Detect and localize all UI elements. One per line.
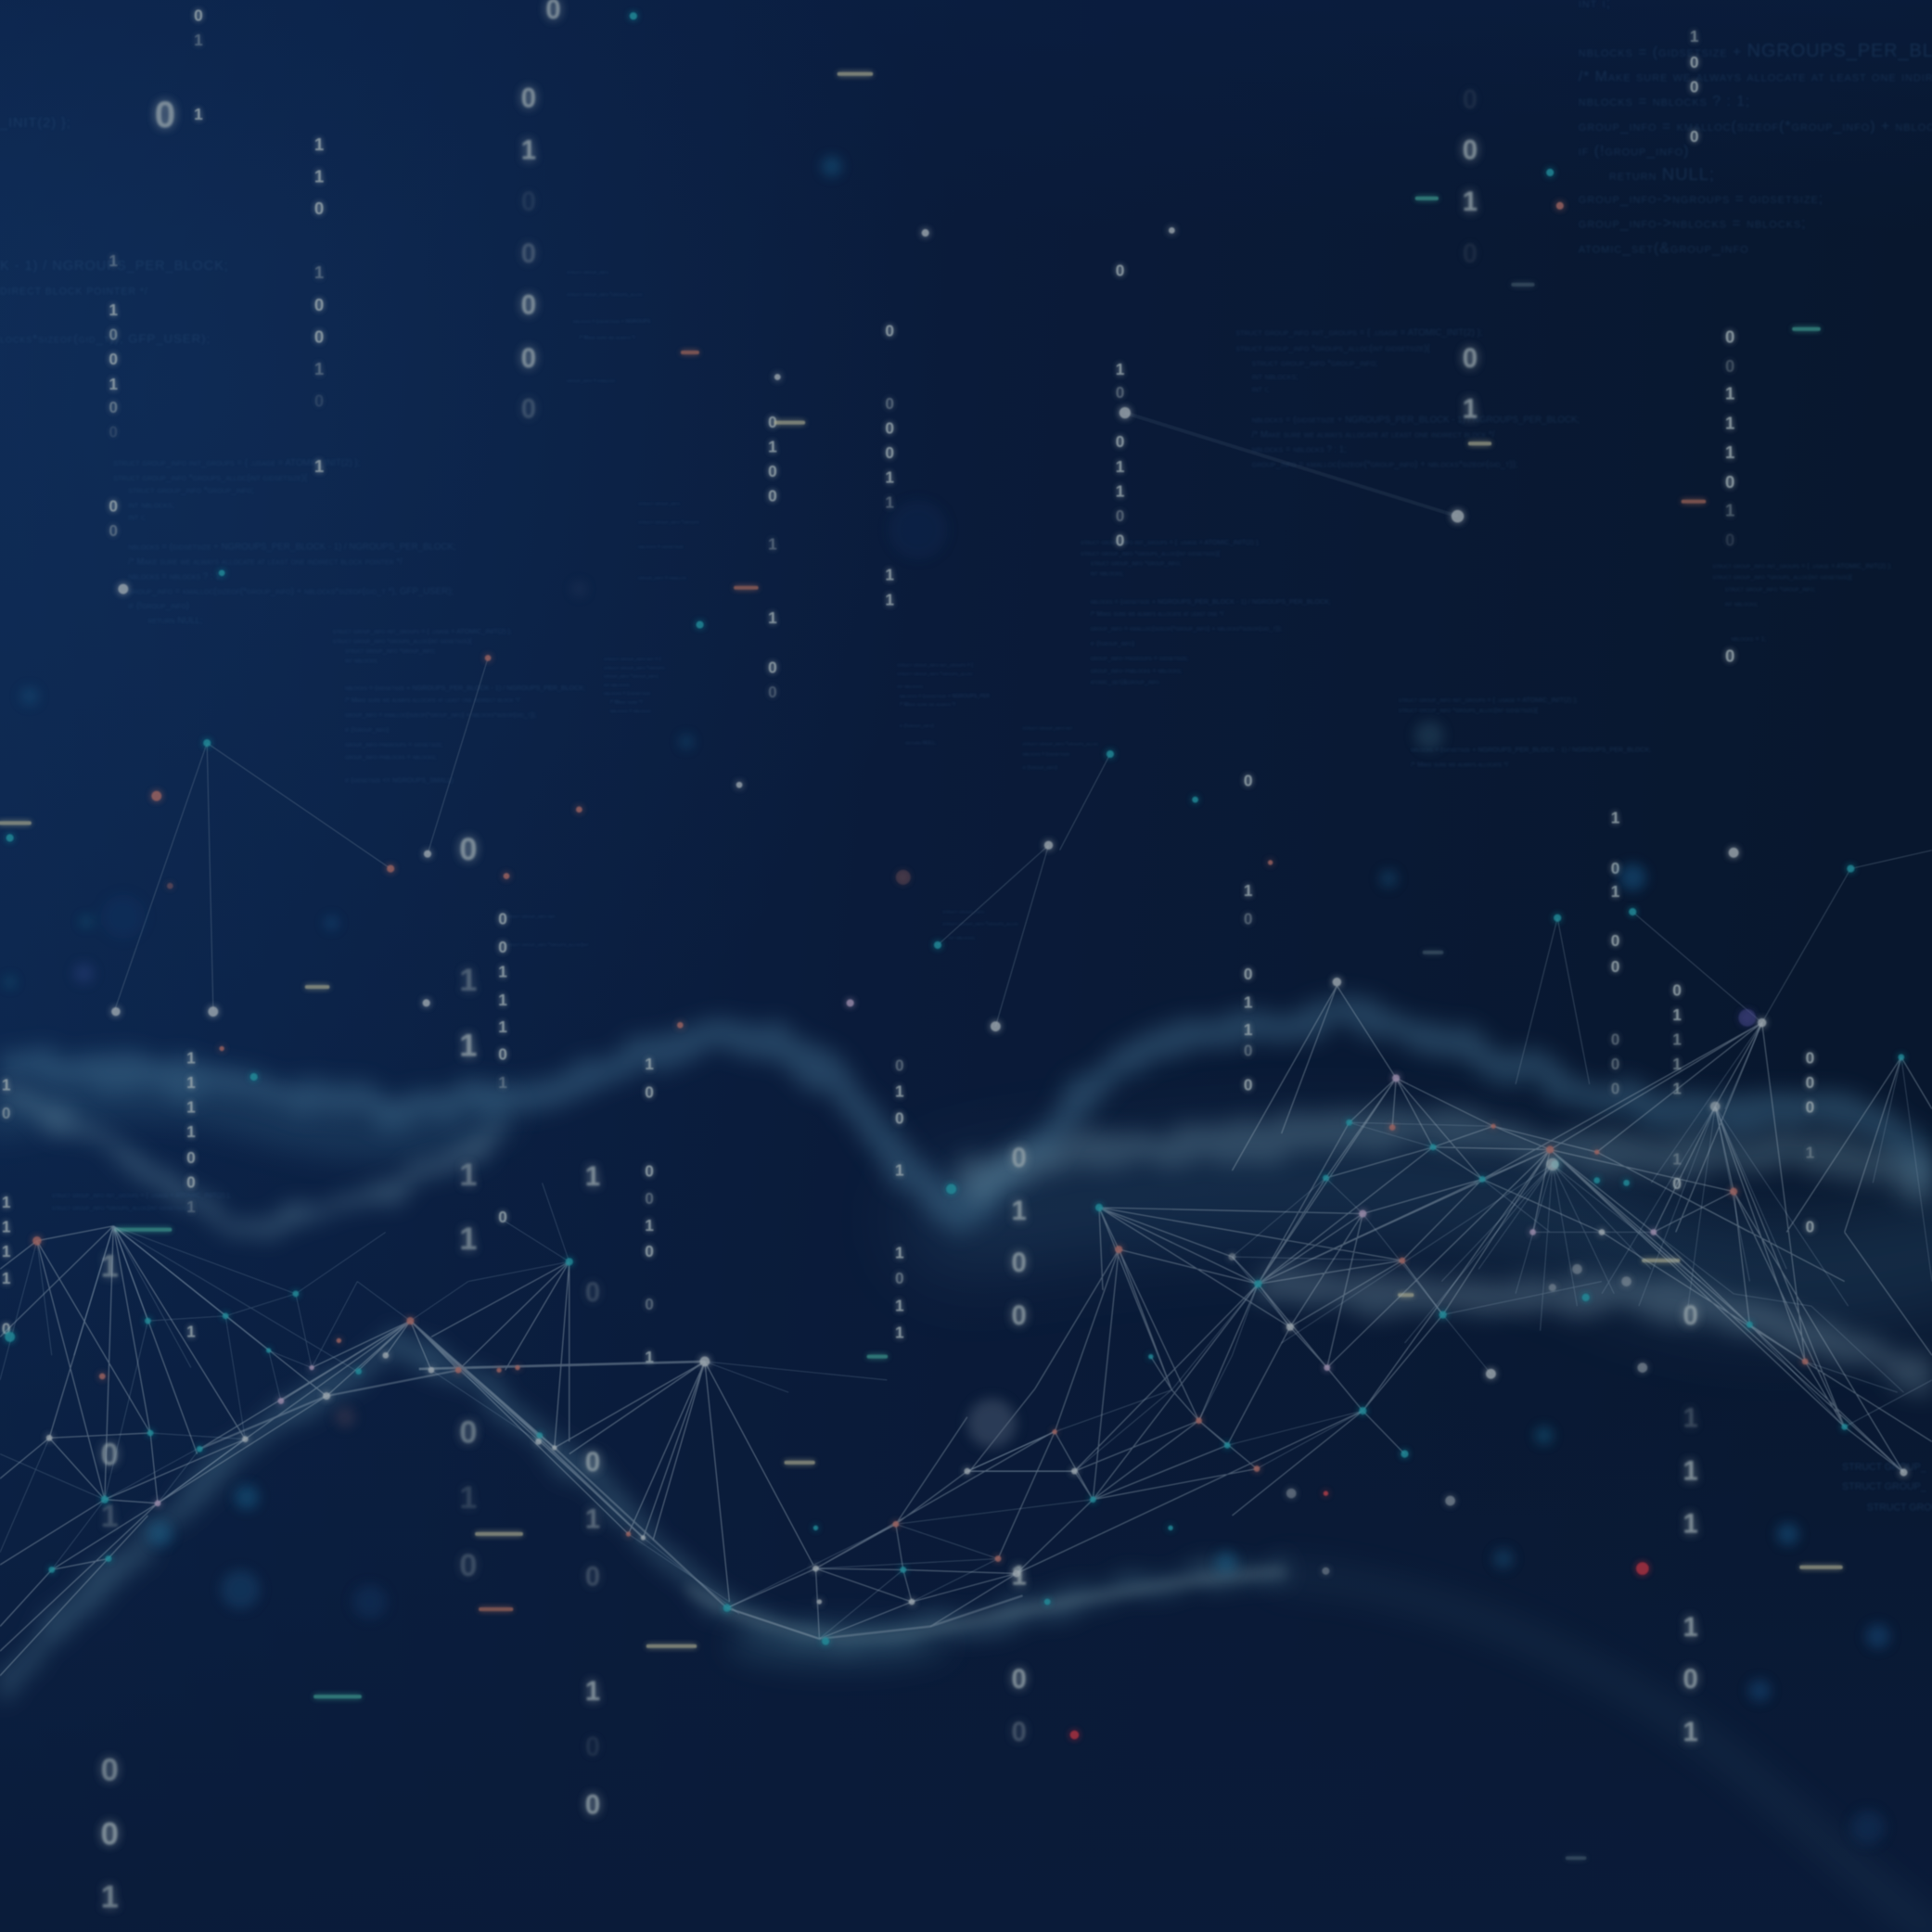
binary digit columns, small and sharp: 0 bbox=[2, 1320, 10, 1338]
binary digit columns, small and sharp: 1 bbox=[645, 1348, 654, 1366]
binary digit columns, small and sharp: 0 bbox=[1116, 506, 1124, 525]
blurred code text block top right: group_info->ngroups = gidsetsize; bbox=[1579, 191, 1823, 207]
faint code fragments: struct group_info *groups_alloc(int gidsetsize){ bbox=[1235, 344, 1430, 354]
binary digit columns, large and blurred: 1 bbox=[1683, 1718, 1698, 1747]
binary digit columns, small and sharp: 0 bbox=[1806, 1217, 1814, 1235]
binary digit columns, small and sharp: 1 bbox=[186, 1197, 196, 1216]
small code fragments: nblocks = (gidsetsize + NGROUPS_PER_BLOCK - 1) / NGROUPS_PER_BLOCK; bbox=[345, 685, 585, 692]
binary digit columns, small and sharp: 1 bbox=[194, 31, 203, 49]
binary digit columns, small and sharp: 0 bbox=[1244, 909, 1253, 928]
binary digit columns, small and sharp: 1 bbox=[2, 1269, 11, 1287]
faint code fragments: int nblocks; bbox=[1252, 372, 1299, 382]
small code fragments: group_info->ngroups = gidsetsize; bbox=[345, 741, 443, 748]
binary digit columns, small and sharp: 1 bbox=[109, 375, 118, 393]
binary digit columns, small and sharp: 1 bbox=[768, 438, 777, 456]
binary digit columns, small and sharp: 0 bbox=[186, 1148, 196, 1167]
binary digit columns, small and sharp: 1 bbox=[1672, 1149, 1682, 1168]
binary digit columns, small and sharp: 0 bbox=[768, 462, 777, 480]
binary digit columns, small and sharp: 1 bbox=[186, 1073, 196, 1092]
binary digit columns, large and blurred: 1 bbox=[1683, 1510, 1698, 1540]
tiny code fragments: struct group_info *groups bbox=[638, 520, 699, 526]
binary digit columns, small and sharp: 1 bbox=[895, 1243, 904, 1261]
binary digit columns, large and blurred: 0 bbox=[521, 239, 536, 269]
binary digit columns, large and blurred: 1 bbox=[101, 1499, 119, 1534]
binary digit columns, small and sharp: 1 bbox=[1611, 882, 1620, 901]
binary digit columns, small and sharp: 0 bbox=[645, 1083, 654, 1102]
tiny code fragments: if (!group_info) bbox=[900, 723, 934, 729]
binary digit columns, small and sharp: 1 bbox=[314, 167, 324, 186]
tiny code fragments: struct group_info init = { bbox=[604, 657, 661, 662]
faint code fragments: return NULL; bbox=[147, 616, 203, 626]
blurred code text block top right: nblocks = nblocks ? : 1; bbox=[1579, 94, 1750, 109]
binary digit columns, small and sharp: 1 bbox=[314, 359, 324, 378]
binary digit columns, small and sharp: 1 bbox=[1672, 1030, 1682, 1049]
binary digit columns, large and blurred: 1 bbox=[1463, 187, 1478, 217]
binary digit columns, small and sharp: 0 bbox=[885, 394, 894, 413]
binary digit columns, small and sharp: 0 bbox=[645, 1162, 654, 1181]
binary digit columns, large and blurred: 1 bbox=[459, 1028, 477, 1063]
faint code fragments: struct group_info init_groups = { .usage = ATOMIC_INIT(2) }; bbox=[1235, 327, 1483, 338]
binary digit columns, small and sharp: 1 bbox=[895, 1324, 904, 1342]
tiny code fragments: struct group_info init bbox=[1023, 725, 1073, 731]
binary digit columns, small and sharp: 0 bbox=[1690, 53, 1698, 71]
small code fragments: struct group_info *groups_alloc(int gidsetsize){ bbox=[1713, 573, 1852, 581]
binary digit columns, small and sharp: 0 bbox=[1244, 1076, 1253, 1094]
binary digit columns, large and blurred: 0 bbox=[1011, 1144, 1027, 1173]
tiny code fragments: int nblocks; bbox=[949, 935, 975, 940]
network mesh: left secondary fine lines bbox=[0, 1183, 887, 1614]
blurred code text block top left: K - 1) / NGROUPS_PER_BLOCK; bbox=[0, 259, 229, 274]
tiny code fragments: struct group_info *groups_alloc bbox=[897, 672, 973, 677]
small code fragments: struct group_info init_groups = { .usage = ATOMIC_INIT(2) }; bbox=[333, 628, 512, 635]
faint code fragments: if (!group_info) bbox=[128, 601, 189, 611]
binary digit columns, small and sharp: 0 bbox=[1725, 646, 1734, 665]
faint code fragments: struct group_info *group_info; bbox=[1252, 359, 1377, 369]
binary digit columns, small and sharp: 1 bbox=[1690, 27, 1699, 45]
binary digit columns, small and sharp: 0 bbox=[1806, 1098, 1814, 1117]
binary digit columns, large and blurred: 0 bbox=[459, 1548, 477, 1583]
binary digit columns, small and sharp: 0 bbox=[1672, 980, 1682, 999]
binary digit columns, small and sharp: 0 bbox=[885, 419, 894, 438]
tiny code fragments: nblocks = (gidsetsize + NGROUPS_PER bbox=[900, 694, 990, 699]
small code fragments: struct group_info *group_info; bbox=[1091, 560, 1181, 568]
binary digit columns, small and sharp: 0 bbox=[109, 423, 118, 441]
binary digit columns, small and sharp: 1 bbox=[1725, 501, 1734, 520]
binary digit columns, large and blurred: 1 bbox=[585, 1677, 600, 1707]
blurred code text block top right: atomic_set(&group_info bbox=[1579, 240, 1749, 256]
binary digit columns, small and sharp bbox=[2, 6, 1815, 1366]
binary digit columns, large and blurred: 0 bbox=[1463, 135, 1478, 165]
small code fragments bbox=[52, 539, 1932, 1514]
binary digit columns, small and sharp: 0 bbox=[194, 6, 203, 25]
small code fragments: group_info->ngroups = gidsetsize; bbox=[1091, 655, 1189, 662]
binary digit columns, small and sharp: 1 bbox=[186, 1122, 196, 1141]
tiny code fragments bbox=[505, 270, 1099, 948]
binary digit columns, large and blurred: 0 bbox=[585, 1448, 600, 1478]
blurred code text block top left: DIRECT BLOCK POINTER */ bbox=[0, 286, 148, 297]
binary digit columns, large and blurred: 0 bbox=[459, 1415, 477, 1451]
binary digit columns, small and sharp: 1 bbox=[1116, 457, 1125, 476]
binary digit columns, small and sharp: 0 bbox=[895, 1056, 904, 1074]
binary digit columns, small and sharp: 0 bbox=[1611, 1030, 1619, 1049]
binary digit columns, small and sharp: 1 bbox=[1611, 808, 1620, 826]
sparse upper connections bbox=[115, 413, 1932, 1084]
small code fragments: /* Make sure we always allocate */ bbox=[1411, 761, 1508, 768]
binary digit columns, small and sharp: 0 bbox=[498, 909, 507, 928]
binary digit columns, small and sharp: 0 bbox=[1806, 1048, 1814, 1067]
binary digit columns, small and sharp: 0 bbox=[895, 1109, 904, 1128]
blurred code text block top right bbox=[1579, 0, 1932, 256]
binary digit columns, small and sharp: 0 bbox=[109, 350, 118, 368]
binary digit columns, small and sharp: 1 bbox=[1244, 993, 1253, 1012]
binary digit columns, large and blurred: 0 bbox=[101, 1438, 119, 1473]
binary digit columns, large and blurred: 0 bbox=[521, 394, 536, 424]
tiny code fragments: if (!group_info) bbox=[1023, 765, 1057, 771]
binary digit columns, large and blurred: 1 bbox=[585, 1162, 600, 1192]
small code fragments: group_info = kmalloc(sizeof(*group_info) + nblocks*sizeof(gid_t)); bbox=[345, 711, 536, 719]
binary digit columns, small and sharp: 1 bbox=[109, 251, 118, 270]
tiny code fragments: nblocks = (gidsetsize bbox=[1023, 751, 1070, 757]
tiny code fragments: int nblocks; bbox=[604, 683, 630, 688]
binary digit columns, large and blurred: 1 bbox=[459, 1222, 477, 1257]
binary digit columns, small and sharp: 1 bbox=[1116, 360, 1125, 378]
tiny code fragments: struct group_info init bbox=[505, 915, 556, 920]
binary digit columns, small and sharp: 1 bbox=[1672, 1005, 1682, 1024]
faint code fragments: /* Make sure we always allocate at least one indirect block */ bbox=[1252, 430, 1495, 441]
binary digit columns, small and sharp: 0 bbox=[1611, 859, 1619, 877]
tiny code fragments: /* Make sure we always */ bbox=[579, 335, 635, 340]
network nodes: warm red bbox=[32, 202, 1808, 1739]
binary digit columns, large and blurred: 1 bbox=[459, 1480, 477, 1516]
binary digit columns, large and blurred: 0 bbox=[101, 1817, 119, 1852]
binary digit columns, small and sharp: 1 bbox=[1725, 413, 1734, 432]
binary digit columns, small and sharp: 0 bbox=[885, 322, 894, 340]
binary digit columns, small and sharp: 0 bbox=[645, 1295, 654, 1313]
small code fragments: struct group_info *group_info; bbox=[345, 647, 436, 655]
binary digit columns, small and sharp: 1 bbox=[186, 1322, 196, 1340]
binary digit columns, small and sharp: 0 bbox=[109, 326, 118, 344]
binary digit columns, small and sharp: 0 bbox=[1244, 772, 1253, 790]
binary digit columns, small and sharp: 0 bbox=[1611, 1055, 1619, 1073]
binary digit columns, small and sharp: 1 bbox=[194, 105, 203, 123]
small code fragments: struct group_info *groups_alloc(int gidsetsize){ bbox=[1399, 707, 1539, 714]
tiny code fragments: nblocks = gidsetsize bbox=[638, 544, 684, 550]
small code fragments: group_info = kmalloc(sizeof(*group_info) + nblocks*sizeof(gid_t)); bbox=[1091, 625, 1282, 633]
binary digit columns, small and sharp: 1 bbox=[2, 1217, 11, 1235]
network nodes: pink and violet bbox=[155, 999, 1756, 1506]
binary digit columns, large and blurred: 0 bbox=[585, 1790, 600, 1820]
binary digit columns, small and sharp: 1 bbox=[1725, 383, 1734, 403]
small code fragments: /* Make sure we always allocate at least one indirect block */ bbox=[345, 697, 519, 704]
binary digit columns, small and sharp: 1 bbox=[1672, 1080, 1682, 1098]
binary digit columns, large and blurred: 0 bbox=[1463, 239, 1478, 269]
binary digit columns, small and sharp: 1 bbox=[1806, 1144, 1815, 1162]
binary digit columns, small and sharp: 1 bbox=[498, 991, 507, 1009]
binary digit columns, large and blurred: 0 bbox=[585, 1278, 600, 1308]
tiny code fragments: nblocks = (gidsetsize bbox=[604, 691, 651, 697]
network mesh: right secondary fine lines bbox=[727, 1023, 1932, 1639]
binary digit columns, small and sharp: 0 bbox=[1725, 356, 1734, 376]
small code fragments: struct group_info init_groups = { .usage = ATOMIC_INIT(2) }; bbox=[1399, 697, 1578, 704]
binary digit columns, small and sharp: 0 bbox=[498, 1208, 507, 1226]
small code fragments: struct group_info *groups_alloc(int gidsetsize){ bbox=[52, 1205, 192, 1212]
binary digit columns, large and blurred: 0 bbox=[459, 832, 477, 867]
binary digit columns, large and blurred: 0 bbox=[1683, 1301, 1698, 1331]
binary digit columns, large and blurred: 1 bbox=[521, 135, 536, 165]
binary digit columns, small and sharp: 0 bbox=[1672, 1174, 1682, 1193]
small code fragments: group_info->nblocks = nblocks; bbox=[1091, 667, 1182, 674]
binary digit columns, small and sharp: 0 bbox=[1806, 1073, 1814, 1092]
binary digit columns, small and sharp: 1 bbox=[314, 262, 324, 282]
binary digit columns, small and sharp: 0 bbox=[498, 938, 507, 956]
binary digit columns, small and sharp: 1 bbox=[1244, 881, 1253, 900]
binary digit columns, small and sharp: 0 bbox=[768, 413, 777, 431]
small code fragments: int nblocks; bbox=[345, 658, 378, 665]
binary digit columns, small and sharp: 1 bbox=[895, 1160, 904, 1179]
binary digit columns, large and blurred: 1 bbox=[459, 963, 477, 998]
binary digit columns, small and sharp: 0 bbox=[2, 1104, 10, 1122]
binary digit columns, large and blurred: 0 bbox=[521, 84, 536, 114]
binary digit columns, large and blurred: 0 bbox=[1011, 1665, 1027, 1695]
binary digit columns, small and sharp: 1 bbox=[1725, 442, 1734, 462]
small code fragments: atomic_set(&group_info bbox=[1091, 678, 1159, 685]
tiny code fragments: int nblocks; bbox=[897, 684, 924, 689]
binary digit columns, small and sharp: 0 bbox=[1116, 383, 1124, 402]
tiny code fragments: nblocks = nblocks bbox=[610, 709, 651, 714]
tiny code fragments: struct group_info *groups_alloc(int bbox=[505, 942, 589, 948]
tiny code fragments: /* Make sure we always */ bbox=[900, 702, 956, 708]
faint code fragments: nblocks = nblocks ? : 1; bbox=[128, 571, 223, 582]
binary digit columns, small and sharp: 1 bbox=[109, 301, 118, 319]
blurred data waves bbox=[0, 1004, 1932, 1932]
binary digit columns, large and blurred: 0 bbox=[1683, 1665, 1698, 1695]
binary digit columns, small and sharp: 0 bbox=[1725, 531, 1734, 550]
binary digit columns, small and sharp: 1 bbox=[895, 1296, 904, 1314]
binary digit columns, small and sharp: 0 bbox=[1116, 531, 1124, 550]
small code fragments: /* Make sure we always allocate at least one */ bbox=[1091, 610, 1223, 618]
tiny code fragments: return NULL; bbox=[905, 740, 937, 746]
binary digit columns, small and sharp: 1 bbox=[885, 590, 894, 608]
binary digit columns, large and blurred: 0 bbox=[1011, 1718, 1027, 1747]
binary digit columns, small and sharp: 1 bbox=[498, 1017, 507, 1036]
blurred code text block top right: if (!group_info) bbox=[1579, 143, 1689, 159]
tiny code fragments: struct group_info *groups_alloc bbox=[1023, 742, 1099, 748]
binary digit columns, large and blurred: 1 bbox=[1683, 1403, 1698, 1433]
binary digit columns, small and sharp: 0 bbox=[1690, 78, 1698, 96]
tiny code fragments: struct group_info *groups bbox=[604, 665, 665, 671]
blurred code text block top left: locks*sizeof(gid_t)), GFP_USER); bbox=[0, 331, 211, 345]
binary digit columns, small and sharp: 1 bbox=[768, 534, 777, 553]
binary digit columns, large and blurred: 1 bbox=[101, 1248, 119, 1284]
binary digit columns, small and sharp: 0 bbox=[1244, 1041, 1253, 1059]
binary digit columns, large and blurred: 0 bbox=[585, 1563, 600, 1593]
tiny code fragments: /* Make sure */ bbox=[610, 700, 643, 706]
binary digit columns, small and sharp: 1 bbox=[1244, 1020, 1253, 1039]
binary digit columns, small and sharp: 1 bbox=[1116, 481, 1125, 500]
binary digit columns, large and blurred: 0 bbox=[1463, 344, 1478, 374]
blurred code text block top right: group_info->nblocks = nblocks; bbox=[1579, 216, 1806, 232]
faint code fragments: int nblocks; bbox=[128, 500, 174, 510]
small code fragments: struct group_info *groups_alloc(int gidsetsize){ bbox=[333, 637, 473, 645]
binary digit columns, large and blurred: 0 bbox=[521, 291, 536, 321]
faint code fragments: nblocks = (gidsetsize + NGROUPS_PER_BLOCK - 1) / NGROUPS_PER_BLOCK; bbox=[1252, 416, 1580, 426]
binary digit columns, large and blurred: 0 bbox=[521, 344, 536, 374]
binary digit columns, small and sharp: 0 bbox=[314, 390, 324, 410]
binary digit columns, small and sharp: 0 bbox=[186, 1173, 196, 1192]
binary digit columns, small and sharp: 0 bbox=[1611, 1080, 1619, 1098]
small code fragments: if (!group_info) bbox=[1091, 640, 1134, 647]
tiny code fragments: struct group_info bbox=[942, 909, 984, 915]
binary digit columns, small and sharp: 0 bbox=[1725, 326, 1734, 346]
faint code fragments: group_info = kmalloc(sizeof(*group_info) + nblocks*sizeof(gid_t *), GFP_USER); bbox=[128, 586, 454, 596]
blurred code text block top left bbox=[0, 116, 229, 345]
binary digit columns, small and sharp: 1 bbox=[2, 1193, 11, 1211]
binary digit columns, small and sharp: 0 bbox=[1244, 965, 1253, 983]
small code fragments: struct group_info init_groups = { .usage = ATOMIC_INIT(2) }; bbox=[1081, 539, 1260, 546]
binary digit columns, small and sharp: 0 bbox=[314, 198, 324, 218]
binary digit columns, large and blurred: 0 bbox=[1011, 1301, 1027, 1331]
small code fragments: STRUCT GROUP_ bbox=[1842, 1462, 1927, 1473]
binary digit columns, small and sharp: 0 bbox=[314, 326, 324, 346]
binary digit columns, small and sharp: 0 bbox=[1725, 472, 1734, 492]
binary digit columns, small and sharp: 0 bbox=[1116, 262, 1124, 280]
binary digit columns, small and sharp: 0 bbox=[109, 521, 118, 540]
tiny code fragments: struct group_info *groups_alloc bbox=[567, 292, 643, 298]
tiny code fragments: struct group_info *groups_alloc bbox=[942, 922, 1018, 928]
faint code fragments: nblocks = nblocks ? : 1; bbox=[1252, 445, 1347, 455]
binary digit columns, small and sharp: 0 bbox=[1611, 957, 1619, 976]
binary digit columns, small and sharp: 1 bbox=[768, 608, 777, 627]
binary digit columns, small and sharp: 0 bbox=[498, 1044, 507, 1063]
binary digit columns, large and blurred: 1 bbox=[1683, 1456, 1698, 1486]
blurred code text block top right: return NULL; bbox=[1609, 164, 1715, 184]
faint code fragments: /* Make sure we always allocate at least one indirect block pointer */ bbox=[128, 557, 403, 567]
binary digit columns, large and blurred: 0 bbox=[101, 1753, 119, 1788]
small code fragments: nblocks = (gidsetsize + NGROUPS_PER_BLOCK - 1) / NGROUPS_PER_BLOCK; bbox=[1091, 598, 1331, 606]
network nodes: pale white bbox=[46, 227, 1907, 1605]
small code fragments: int nblocks; bbox=[1091, 569, 1124, 577]
binary digit columns, small and sharp: 1 bbox=[498, 1073, 507, 1092]
binary digit columns, small and sharp: 0 bbox=[768, 658, 777, 676]
binary digit columns, small and sharp: 1 bbox=[885, 566, 894, 584]
binary digit columns, large and blurred: 1 bbox=[1011, 1561, 1027, 1591]
tiny code fragments: group_info = kmalloc bbox=[638, 575, 687, 581]
binary digit columns, small and sharp: 1 bbox=[645, 1216, 654, 1235]
small code fragments: nblocks = 1; bbox=[1731, 635, 1766, 643]
binary digit columns, large and blurred: 0 bbox=[521, 187, 536, 217]
binary digit columns, small and sharp: 1 bbox=[645, 1055, 654, 1073]
binary digit columns, small and sharp: 1 bbox=[314, 134, 324, 154]
tiny code fragments: group_info = kmalloc bbox=[567, 378, 616, 384]
faint code fragments: int i; bbox=[1252, 384, 1269, 394]
binary digit columns, small and sharp: 0 bbox=[314, 295, 324, 314]
small code fragments: STRUCT GROUP_ bbox=[1842, 1481, 1927, 1492]
tiny code fragments: nblocks = (gidsetsize + NGROUPS bbox=[573, 319, 651, 325]
small code fragments: group_info->nblocks = nblocks; bbox=[345, 753, 437, 761]
small code fragments: struct group_info *groups_alloc(int gidsetsize){ bbox=[1081, 550, 1221, 557]
binary digit columns, small and sharp: 0 bbox=[885, 443, 894, 462]
small code fragments: int nblocks; bbox=[1725, 601, 1759, 608]
binary digit columns, large and blurred: 1 bbox=[1463, 394, 1478, 424]
faint code fragments bbox=[113, 327, 1580, 626]
tiny code fragments: struct group_info bbox=[638, 502, 680, 507]
binary digit columns, large and blurred: 1 bbox=[1683, 1613, 1698, 1643]
tiny code fragments: struct group_info bbox=[567, 270, 608, 275]
binary digit columns, large and blurred: 1 bbox=[585, 1504, 600, 1534]
faint code fragments: struct group_info *groups_alloc(int gidsetsize){ bbox=[113, 473, 308, 483]
binary digit columns, small and sharp: 1 bbox=[314, 456, 324, 476]
binary digit columns, small and sharp: 0 bbox=[109, 398, 118, 416]
tiny code fragments: struct group_info init_groups = { bbox=[897, 663, 973, 669]
binary digit columns, small and sharp: 1 bbox=[885, 468, 894, 487]
binary digit columns, small and sharp: 0 bbox=[1611, 931, 1619, 950]
binary digit columns, small and sharp: 0 bbox=[645, 1242, 654, 1260]
faint code fragments: int i; bbox=[128, 513, 146, 523]
binary digit columns, small and sharp: 0 bbox=[895, 1269, 904, 1287]
binary digit columns, large and blurred: 0 bbox=[1463, 85, 1478, 115]
binary digit columns, small and sharp: 1 bbox=[186, 1048, 196, 1067]
small code fragments: if (!group_info) bbox=[345, 726, 389, 734]
binary digit columns, small and sharp: 1 bbox=[186, 1098, 196, 1117]
binary digit columns, large and blurred: 0 bbox=[1011, 1248, 1027, 1278]
binary digit columns, small and sharp: 0 bbox=[768, 683, 777, 701]
faint code fragments: struct group_info *group_info; bbox=[128, 485, 254, 495]
faint code fragments: group_info = kmalloc(sizeof(*group_info) + nblocks*sizeof(gid_t)); bbox=[1252, 459, 1518, 469]
binary digit columns, small and sharp: 0 bbox=[1116, 432, 1124, 451]
binary digit columns, small and sharp: 1 bbox=[1672, 1055, 1682, 1073]
binary digit columns, small and sharp: 0 bbox=[109, 496, 118, 515]
network mesh: left bbox=[0, 1226, 813, 1676]
binary digit columns, large and blurred: 0 bbox=[155, 95, 175, 135]
small code fragments: struct group_info *group_info; bbox=[1725, 586, 1815, 594]
faint code fragments: nblocks = (gidsetsize + NGROUPS_PER_BLOCK - 1) / NGROUPS_PER_BLOCK; bbox=[128, 542, 456, 552]
small code fragments: nblocks = (gidsetsize + NGROUPS_PER_BLOCK - 1) / NGROUPS_PER_BLOCK; bbox=[1411, 746, 1651, 753]
binary digit columns, small and sharp: 1 bbox=[885, 493, 894, 511]
tiny code fragments: group_info *group_info; bbox=[604, 674, 659, 680]
binary digit columns, small and sharp: 0 bbox=[768, 487, 777, 505]
network mesh: center and right bbox=[727, 986, 1932, 1639]
small code fragments: if (gidsetsize <= NGROUPS_SMALL) bbox=[345, 777, 454, 785]
small code fragments: struct group_info init_groups = { .usage = ATOMIC_INIT(2) }; bbox=[52, 1192, 231, 1199]
binary digit columns, small and sharp: 0 bbox=[645, 1189, 654, 1208]
binary digit columns, small and sharp: 1 bbox=[2, 1242, 11, 1260]
blurred code text block top left: _INIT(2) }; bbox=[0, 116, 71, 131]
faint code fragments: struct group_info init_groups = { .usage = ATOMIC_INIT(2) }; bbox=[113, 458, 360, 468]
binary digit columns, small and sharp: 1 bbox=[498, 962, 507, 980]
binary digit columns, large and blurred: 1 bbox=[101, 1879, 119, 1914]
binary digit columns, small and sharp: 1 bbox=[895, 1081, 904, 1100]
binary digit columns, large and blurred: 1 bbox=[459, 1158, 477, 1193]
binary digit columns, large and blurred: 0 bbox=[585, 1733, 600, 1762]
binary digit columns, large and blurred: 1 bbox=[1011, 1196, 1027, 1226]
small code fragments: struct group_info init_groups = { .usage = ATOMIC_INIT(2) }; bbox=[1713, 562, 1892, 569]
binary digit columns, small and sharp: 1 bbox=[2, 1076, 11, 1094]
binary digit columns, small and sharp: 0 bbox=[1690, 127, 1698, 146]
